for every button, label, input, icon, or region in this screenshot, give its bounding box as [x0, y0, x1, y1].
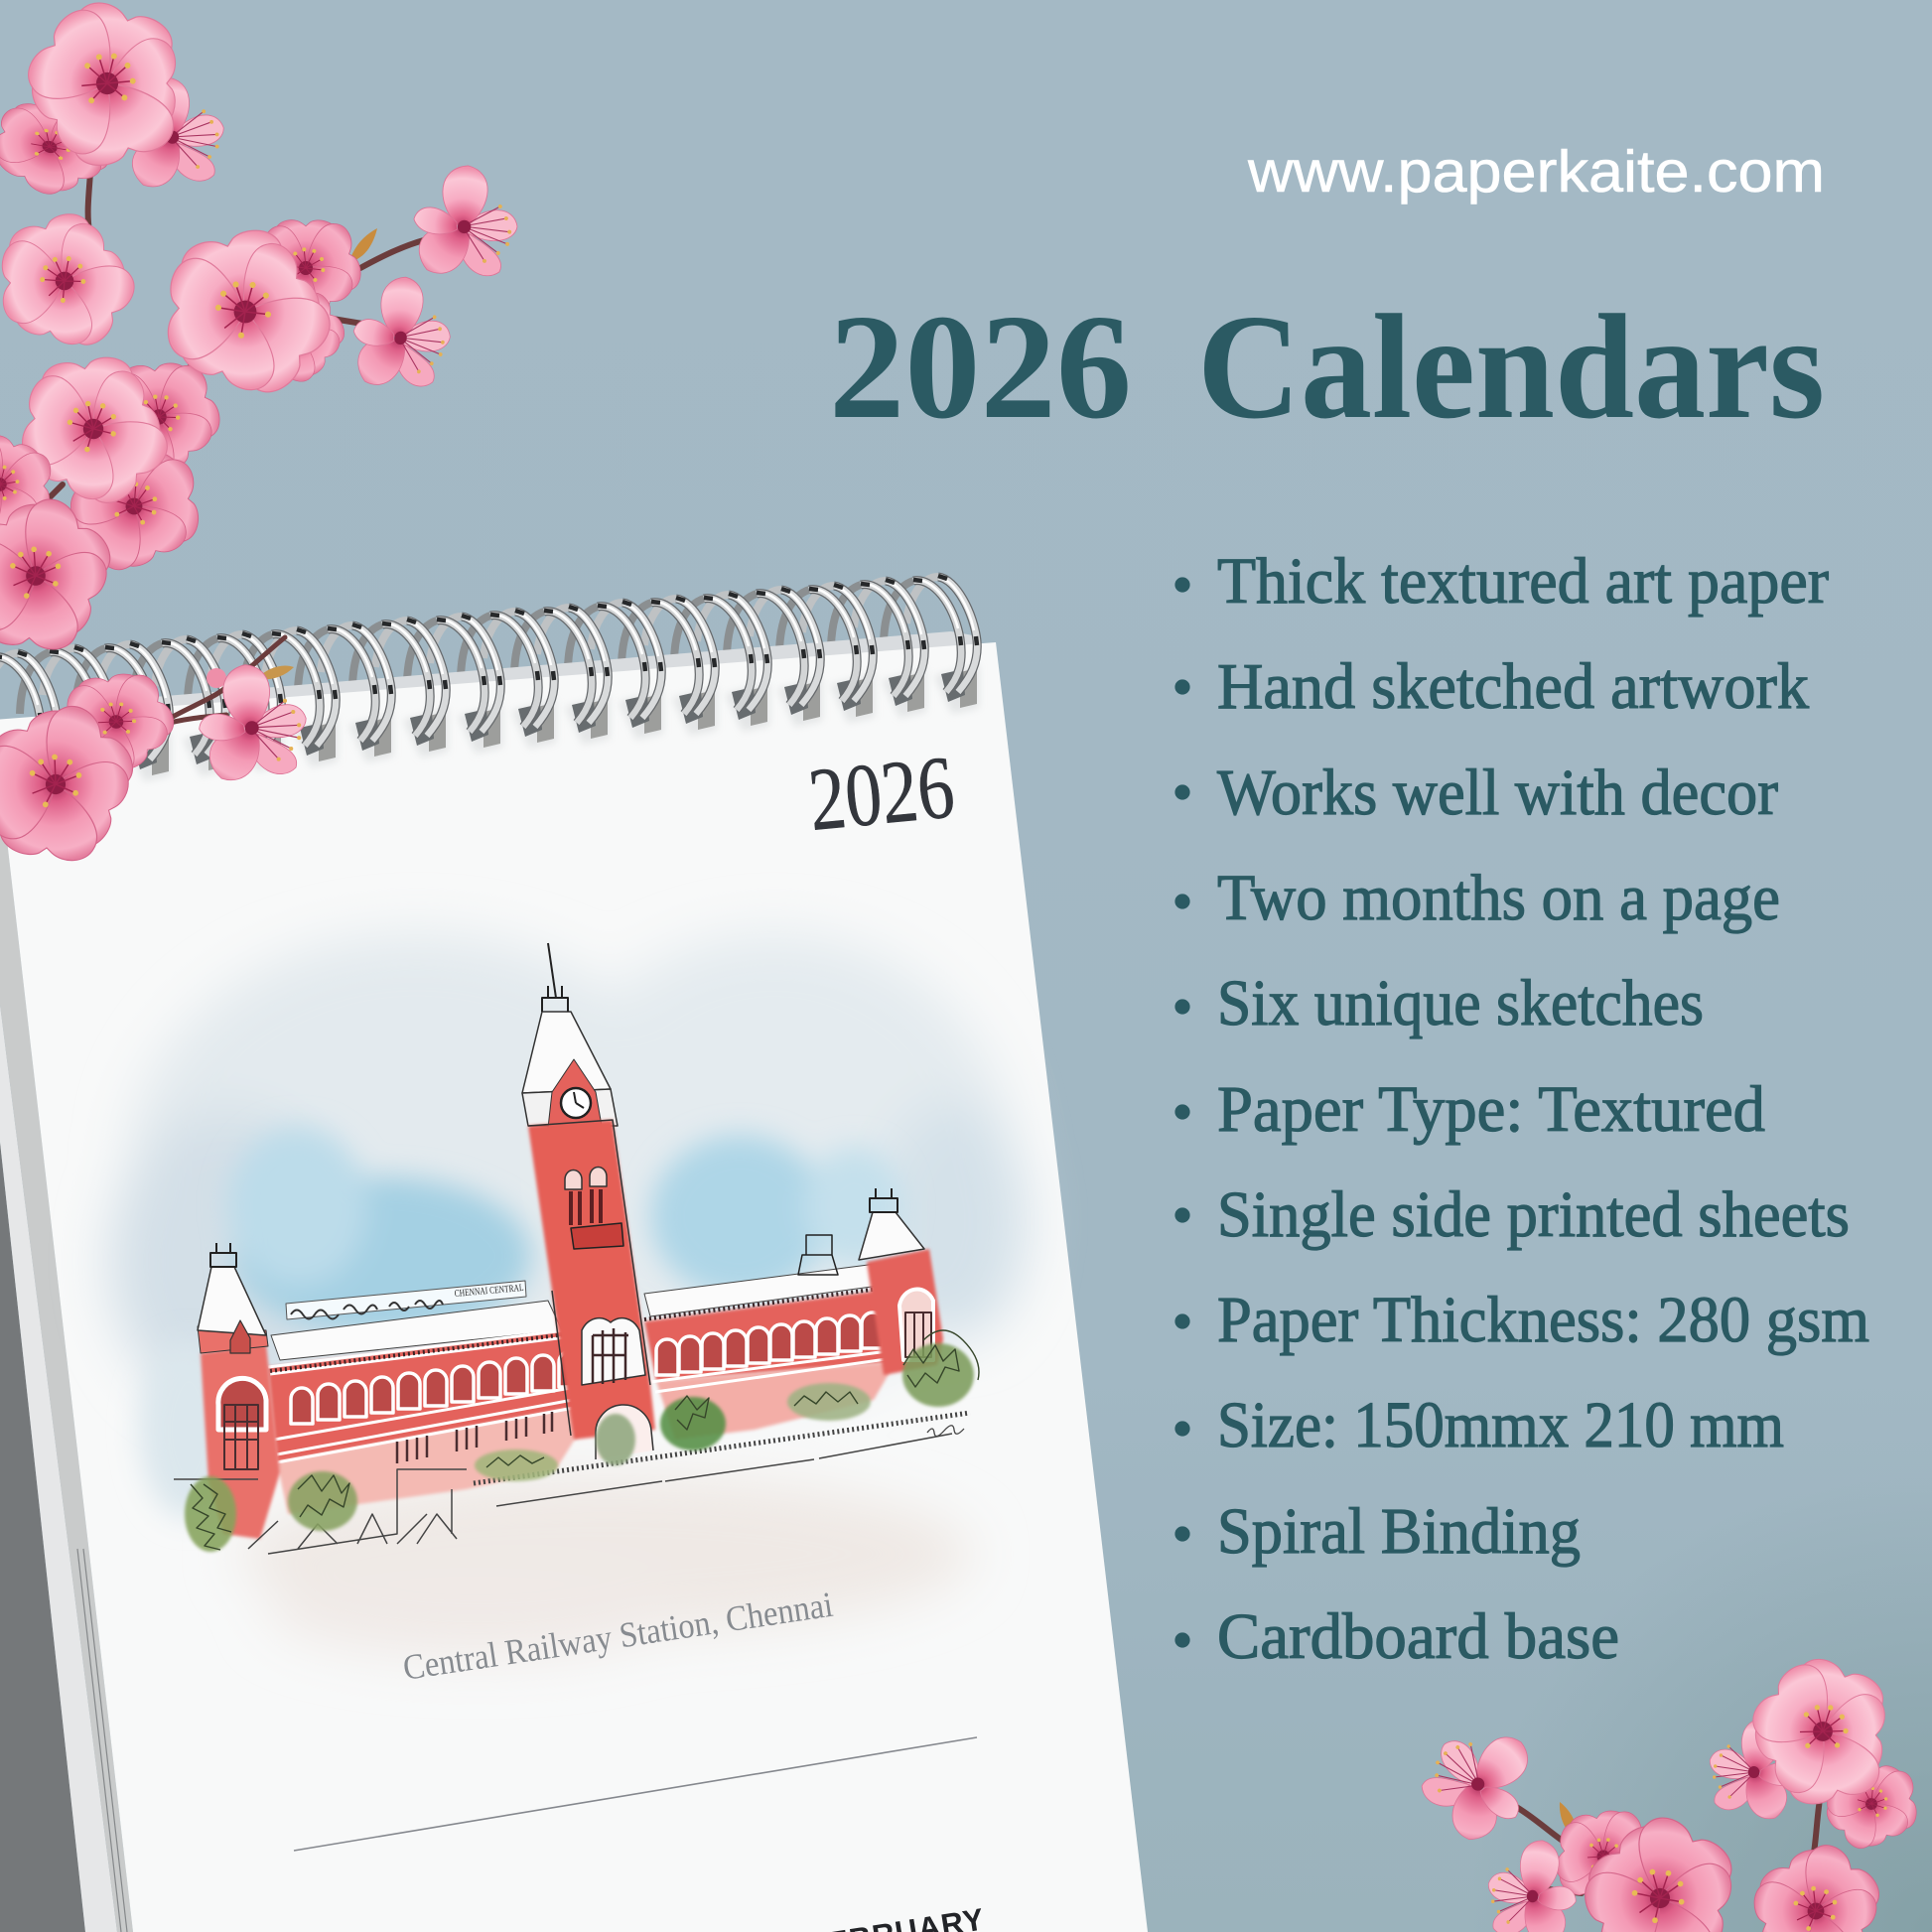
item 10: Spiral Binding — [1217, 1495, 1581, 1568]
website: www.paperkaite.com — [1247, 139, 1825, 205]
item 1: Thick textured art paper — [1217, 545, 1829, 618]
trees — [185, 1330, 979, 1552]
item 4: Two months on a page — [1217, 862, 1780, 934]
spiral rings, front part — [0, 576, 979, 790]
station signboard: CHENNAI CENTRAL — [454, 1283, 524, 1300]
watercolour wash — [109, 933, 1028, 1658]
blossom branch: bottom right — [1408, 1643, 1932, 1932]
title: Calendars — [1197, 283, 1825, 450]
item 7: Single side printed sheets — [1217, 1178, 1850, 1251]
left wing — [268, 1301, 581, 1514]
calendar page — [0, 642, 1148, 1932]
feature list — [1175, 545, 1869, 1673]
calendar — [0, 576, 1148, 1932]
station signboard — [286, 1281, 526, 1319]
right corner tower — [798, 1188, 943, 1375]
blossom branch: calendar corner — [0, 637, 310, 878]
left corner tower — [198, 1243, 280, 1539]
item 5: Six unique sketches — [1217, 967, 1704, 1039]
item 6: Paper Type: Textured — [1217, 1073, 1765, 1146]
spiral rings, back part — [0, 577, 938, 719]
blossom branch: top left — [0, 0, 529, 668]
item 11: Cardboard base — [1217, 1600, 1619, 1673]
signature line — [294, 1737, 977, 1851]
item 3: Works well with decor — [1217, 757, 1778, 829]
item 8: Paper Thickness: 280 gsm — [1217, 1284, 1869, 1356]
right wing — [644, 1263, 896, 1440]
item 2: Hand sketched artwork — [1217, 650, 1809, 723]
back board edge — [129, 631, 973, 715]
title: 2026 — [829, 283, 1132, 450]
desk shadow — [0, 1142, 85, 1932]
clock tower — [522, 943, 655, 1459]
caption: Central Railway Station, Chennai — [400, 1585, 835, 1688]
page year: 2026 — [804, 738, 958, 850]
page stack — [0, 720, 133, 1932]
illustration: Chennai Central station — [174, 943, 979, 1554]
item 9: Size: 150mmx 210 mm — [1217, 1389, 1784, 1461]
foreground sketch lines and fence — [174, 1413, 970, 1554]
